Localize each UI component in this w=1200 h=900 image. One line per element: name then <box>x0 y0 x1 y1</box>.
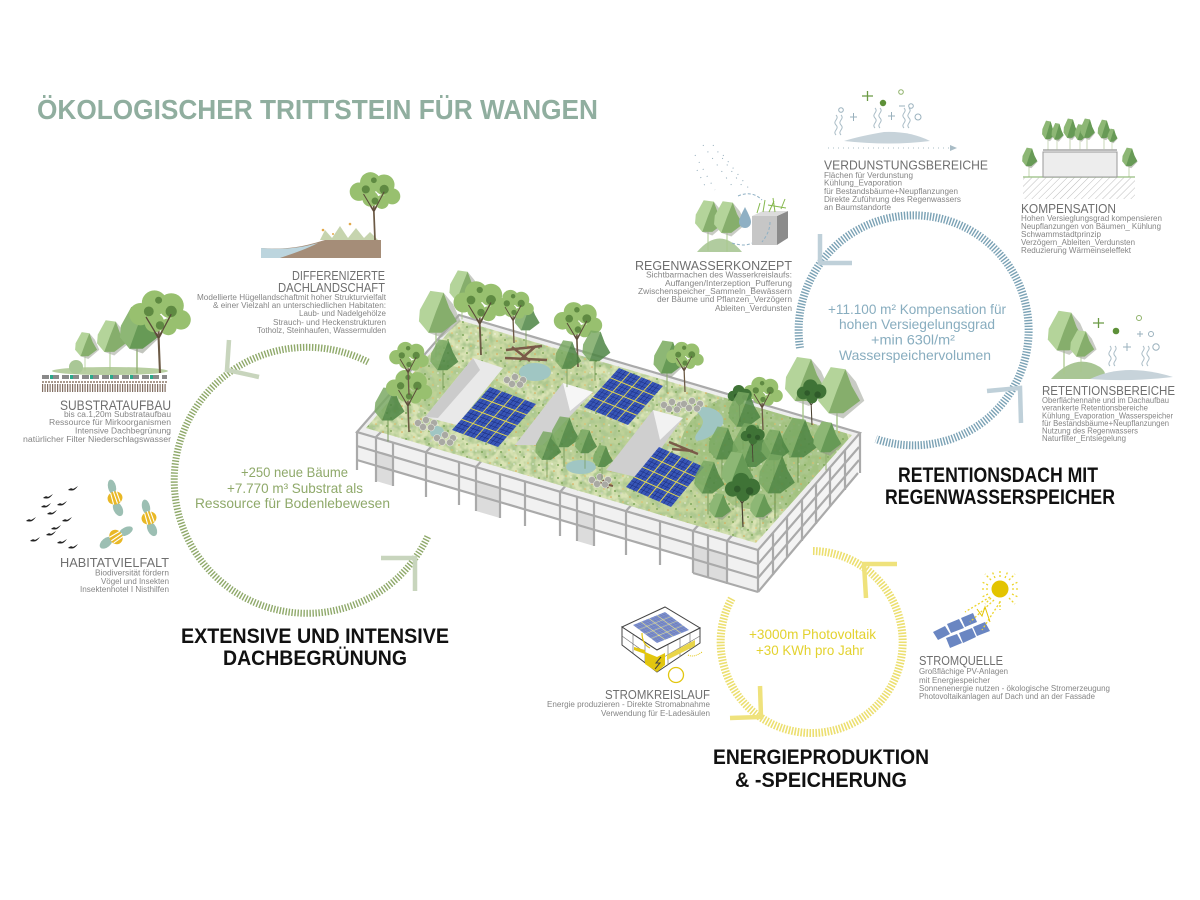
text block: für Bestandsbäume+Neupflanzungen <box>1042 419 1169 428</box>
yellow ring text <box>749 626 877 658</box>
text block: VERDUNSTUNGSBEREICHE <box>824 158 988 172</box>
text block: STROMQUELLE <box>919 653 1003 668</box>
heading: retentionsdach mit regenwasserspeicher: RETENTIONSDACH MIT <box>898 464 1098 487</box>
heading: extensive und intensive dachbegrünung <box>181 625 449 670</box>
blue ring text: hohen Versiegelungsgrad <box>839 316 995 332</box>
building structure <box>357 315 860 592</box>
text block: Flächen für Verdunstung <box>824 171 913 180</box>
heading: extensive und intensive dachbegrünung: DACHBEGRÜNUNG <box>223 647 407 670</box>
blue ring text: Wasserspeichervolumen <box>839 347 991 363</box>
text block: Ressource für Mirkoorganismen <box>49 418 171 427</box>
icon: birds <box>26 486 78 548</box>
skylight wells <box>425 358 683 478</box>
text block: mit Energiespeicher <box>919 676 990 685</box>
text block: Biodiversität fördern <box>95 569 169 578</box>
panel: substrataufbau <box>23 290 191 444</box>
panel: retentionsbereiche <box>1042 311 1175 443</box>
panel: kompensation <box>1021 118 1162 255</box>
text block: Sichtbarmachen des Wasserkreislaufs: <box>646 270 792 280</box>
text block: natürlicher Filter Niederschlagswasser <box>23 435 171 444</box>
icon: building with trees <box>1022 118 1138 199</box>
text block: Schwammstadtprinzip <box>1021 230 1102 239</box>
text block: verankerte Retentionsbereiche <box>1042 404 1149 412</box>
text block: Auffangen/Interzeption_Pufferung <box>665 279 792 288</box>
icon: sun and solar panels <box>933 570 1019 648</box>
text block: SUBSTRATAUFBAU <box>60 398 171 413</box>
text block: Direkte Zuführung des Regenwassers <box>824 195 961 204</box>
text block: Oberflächennahe und im Dachaufbau <box>1042 396 1169 405</box>
logs and stone piles <box>414 346 704 488</box>
roof meadow <box>366 320 852 543</box>
ring: energy cycle <box>721 551 903 733</box>
ring: water cycle <box>799 215 1029 445</box>
text block: REGENWASSERKONZEPT <box>635 258 792 273</box>
text block: & einer Vielzahl an unterschiedlichen Habitaten: <box>213 301 386 310</box>
heading: energieproduktion und speicherung <box>713 746 929 792</box>
green ring text: Ressource für Bodenlebewesen <box>195 495 390 511</box>
heading: retentionsdach mit regenwasserspeicher <box>885 464 1115 509</box>
text block: Photovoltaikanlagen auf Dach und an der Fassade <box>919 692 1096 701</box>
text block: an Baumstandorte <box>824 203 892 212</box>
blue ring text <box>828 301 1006 363</box>
yellow ring text: +30 KWh pro Jahr <box>756 642 864 658</box>
text block: Neupflanzungen von Bäumen_ Kühlung <box>1021 222 1161 231</box>
panel: regenwasserkonzept <box>635 145 792 313</box>
yellow ring text: +3000m Photovoltaik <box>749 626 877 642</box>
panel: stromquelle <box>919 570 1110 701</box>
panel: differenzierte dachlandschaft <box>197 172 400 335</box>
infographic canvas <box>24 89 1175 787</box>
icon: landscape section <box>261 172 400 258</box>
panel: verdunstungsbereiche <box>824 90 988 212</box>
blue ring text: +min 630l/m² <box>871 332 955 348</box>
text block: für Bestandsbäume+Neupflanzungen <box>824 187 958 196</box>
green ring text: +7.770 m³ Substrat als <box>227 480 363 496</box>
text block: Totholz, Steinhaufen, Wassermulden <box>257 326 386 335</box>
green ring text: +250 neue Bäume <box>241 464 348 480</box>
icon: rain cycle <box>695 145 788 252</box>
text block <box>547 687 711 718</box>
text block: der Bäume und Pflanzen_Verzögern <box>657 295 792 304</box>
icon: trees on substrate layers <box>42 290 191 388</box>
text block: DACHLANDSCHAFT <box>278 280 385 295</box>
heading: energieproduktion und speicherung: ENERGIEPRODUKTION <box>713 746 929 769</box>
text block <box>60 555 169 594</box>
text block <box>635 258 792 313</box>
text block <box>23 398 171 444</box>
ring: green roof cycle <box>174 340 428 613</box>
blue ring text: +11.100 m² Kompensation für <box>828 301 1006 317</box>
text block: Großflächige PV-Anlagen <box>919 667 1008 676</box>
text block: Energie produzieren - Direkte Stromabnahme <box>547 700 711 709</box>
text block: Sonnenenergie nutzen - ökologische Stromerzeugung <box>919 684 1110 693</box>
text block: Hohen Versieglungsgrad kompensieren <box>1021 214 1162 223</box>
text block: HABITATVIELFALT <box>60 555 169 570</box>
text block: Kühlung_Evaporation <box>824 178 902 188</box>
heading: extensive und intensive dachbegrünung: EXTENSIVE UND INTENSIVE <box>181 625 449 648</box>
text block <box>1042 383 1175 443</box>
text block: STROMKREISLAUF <box>605 687 710 702</box>
panel: stromkreislauf <box>547 607 711 718</box>
ponds <box>430 363 723 474</box>
icon: evaporation <box>828 90 957 151</box>
text block: Laub- und Nadelgehölze <box>299 309 387 318</box>
text block: Zwischenspeicher_Sammeln_Bewässern <box>638 287 792 296</box>
text block: Ableiten_Verdunsten <box>715 304 792 313</box>
title: ÖKOLOGISCHER TRITTSTEIN FÜR WANGEN <box>37 94 598 125</box>
text block: Intensive Dachbegrünung <box>75 426 171 436</box>
text block <box>919 653 1110 701</box>
text block: Verzögern_Ableiten_Verdunsten <box>1021 238 1135 247</box>
heading: retentionsdach mit regenwasserspeicher: REGENWASSERSPEICHER <box>885 486 1115 509</box>
icon: building with electric circuit <box>622 607 702 682</box>
text block: Verwendung für E-Ladesäulen <box>601 709 710 718</box>
icon: retention area <box>1048 311 1173 380</box>
text block: KOMPENSATION <box>1021 201 1116 216</box>
text block: DIFFERENIZERTE <box>292 268 385 283</box>
icon: bees <box>95 479 159 552</box>
solar arrays <box>452 368 704 507</box>
text block: Insektenhotel I Nisthilfen <box>80 585 169 594</box>
roof trees <box>374 270 864 532</box>
text block: bis ca.1,20m Substrataufbau <box>64 410 171 419</box>
text block: Reduzierung Wärmeinseleffekt <box>1021 246 1132 255</box>
building with green roof <box>350 270 870 592</box>
text block <box>197 268 387 335</box>
panel: habitatvielfalt <box>26 479 169 594</box>
text block: Modellierte Hügellandschaftmit hoher Strukturvielfalt <box>197 293 387 302</box>
text block: Nutzung des Regenwassers <box>1042 426 1138 436</box>
heading: energieproduktion und speicherung: & -SPEICHERUNG <box>735 769 907 792</box>
text block: Kühlung_Evaporation_Wasserspeicher <box>1042 412 1173 420</box>
text block: RETENTIONSBEREICHE <box>1042 383 1175 398</box>
text block: Strauch- und Heckenstrukturen <box>273 318 386 327</box>
text block <box>824 158 988 212</box>
text block: Vögel und Insekten <box>101 577 169 586</box>
green ring text <box>195 464 390 511</box>
text block: Naturfilter_Entsiegelung <box>1042 434 1126 443</box>
text block <box>1021 201 1162 255</box>
